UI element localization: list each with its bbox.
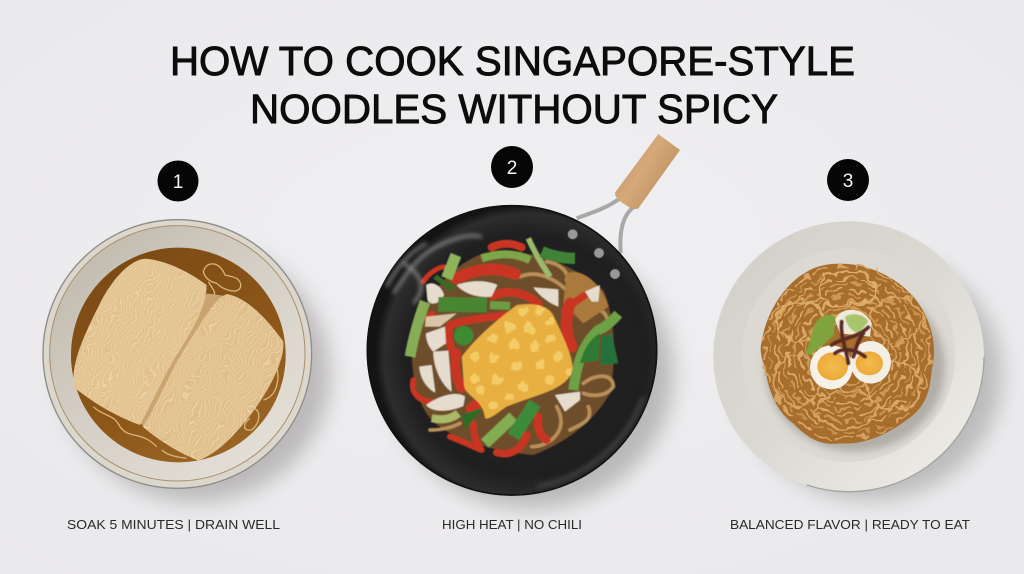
noodle gap fill xyxy=(140,293,230,440)
scrambled egg xyxy=(462,304,573,419)
green vegetables xyxy=(410,238,618,443)
bowl of soaking noodles xyxy=(42,219,330,502)
title: NOODLES WITHOUT SPICY xyxy=(250,86,778,132)
noodle nest xyxy=(761,264,934,444)
boiled eggs xyxy=(810,310,891,389)
plate of finished noodles xyxy=(713,221,1002,500)
caption step 1: SOAK 5 MINUTES | DRAIN WELL xyxy=(67,517,280,532)
food base xyxy=(412,252,614,455)
title: HOW TO COOK SINGAPORE-STYLE xyxy=(170,38,855,84)
noodle shadow xyxy=(765,282,945,452)
wok with stir-fry xyxy=(367,134,680,508)
brown patch xyxy=(563,272,608,323)
loose noodle loops xyxy=(93,264,278,458)
caption step 2: HIGH HEAT | NO CHILI xyxy=(442,517,582,532)
white cabbage xyxy=(419,281,600,412)
rivets xyxy=(568,229,620,279)
noodle block right xyxy=(142,294,284,460)
herb garnish xyxy=(805,314,868,363)
onions and brown strands xyxy=(430,262,613,447)
step number 3: 3 xyxy=(843,171,853,192)
step number 3 xyxy=(827,159,869,201)
steam xyxy=(387,236,482,303)
caption step 3: BALANCED FLAVOR | READY TO EAT xyxy=(730,517,970,532)
title xyxy=(170,38,855,132)
red peppers xyxy=(413,244,585,454)
wok body xyxy=(367,205,657,496)
noodle block left xyxy=(74,258,207,425)
plate well xyxy=(742,249,955,462)
broth xyxy=(71,248,286,462)
step number 1: 1 xyxy=(173,172,183,193)
food xyxy=(410,238,618,455)
wok handle xyxy=(577,134,680,253)
step number 2: 2 xyxy=(507,158,517,179)
step number 2 xyxy=(491,146,533,188)
step number 1 xyxy=(158,160,198,202)
